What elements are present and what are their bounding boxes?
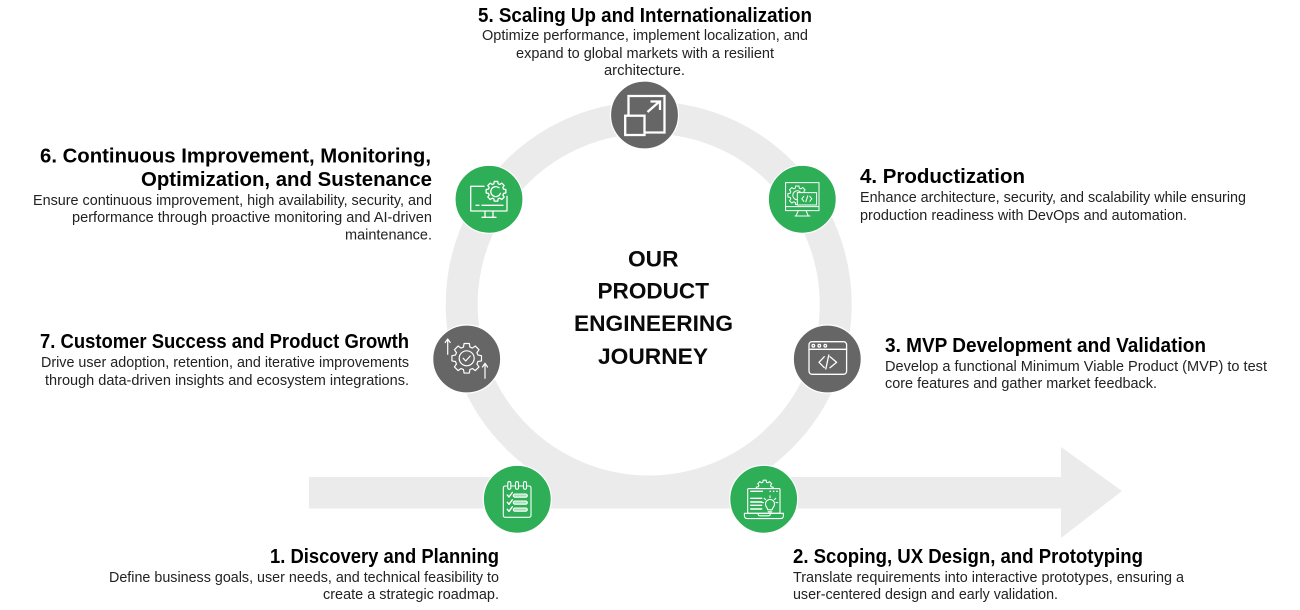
text: step 2 description [793, 570, 1185, 603]
text: step 6 description [33, 193, 432, 244]
text: step 5 description [482, 28, 808, 79]
text: step 3 description: Develop a functional Minimum Viable Product (MVP) to test [885, 359, 1267, 375]
step 7: customer success and product growth [40, 325, 501, 393]
center title: OUR [628, 246, 678, 272]
text: step 3 description: core features and gather market feedback. [885, 376, 1157, 392]
text: step 1 description: Define business goals, user needs, and technical feasibility to [109, 570, 499, 586]
step 5: scaling up and internationalization [478, 5, 812, 149]
icon: browser window with code [793, 325, 861, 393]
heading: step 2: 2. Scoping, UX Design, and Prototyping [793, 546, 1143, 568]
text: step 2 description: Translate requirements into interactive prototypes, ensuring a [793, 570, 1185, 586]
heading: step 7: 7. Customer Success and Product Growth [40, 331, 409, 353]
text: step 1 description [109, 570, 499, 603]
text: step 6 description: Ensure continuous improvement, high availability, security, and [33, 193, 432, 209]
arrow: horizontal journey arrow [309, 447, 1122, 538]
icon: laptop with gear and light bulb [730, 465, 798, 533]
step 3: MVP development and validation [793, 325, 1267, 393]
step 4: productization [768, 165, 1246, 233]
text: step 6 description: performance through proactive monitoring and AI-driven [72, 210, 432, 226]
center title: ENGINEERING [574, 311, 733, 336]
icon: resize squares [610, 81, 678, 149]
step 2: scoping, UX design, and prototyping [730, 465, 1185, 603]
heading: step 4: 4. Productization [860, 166, 1025, 188]
heading: step 5: 5. Scaling Up and Internationalization [478, 5, 812, 27]
center title [574, 246, 733, 369]
ring: journey cycle [462, 118, 836, 492]
text: step 5 description: architecture. [604, 63, 685, 79]
heading: step 6 [40, 146, 432, 191]
text: step 7 description: through data-driven insights and ecosystem integrations. [45, 373, 409, 389]
text: step 4 description: Enhance architecture, security, and scalability while ensuring [860, 190, 1246, 206]
icon: monitor with gear [455, 165, 523, 233]
text: step 4 description [860, 190, 1246, 224]
icon: monitor with code [768, 165, 836, 233]
heading: step 6: Optimization, and Sustenance [141, 169, 432, 191]
step 6: continuous improvement [33, 146, 523, 244]
text: step 5 description: expand to global markets with a resilient [516, 46, 774, 62]
center title: PRODUCT [598, 278, 709, 304]
text: step 2 description: user-centered design and early validation. [793, 587, 1058, 603]
text: step 7 description: Drive user adoption, retention, and iterative improvements [41, 355, 409, 371]
heading: step 3: 3. MVP Development and Validation [885, 335, 1206, 357]
heading: step 6: 6. Continuous Improvement, Monitoring, [40, 146, 431, 168]
text: step 5 description: Optimize performance, implement localization, and [482, 28, 808, 44]
text: step 6 description: maintenance. [345, 228, 432, 244]
step 1: discovery and planning [109, 465, 551, 603]
center title: JOURNEY [598, 344, 708, 369]
text: step 4 description: production readiness with DevOps and automation. [860, 208, 1187, 224]
text: step 7 description [41, 355, 409, 389]
text: step 1 description: create a strategic roadmap. [323, 587, 499, 603]
icon: gear with check and arrows [433, 325, 501, 393]
text: step 3 description [885, 359, 1267, 392]
heading: step 1: 1. Discovery and Planning [270, 546, 499, 568]
icon: checklist notepad [483, 465, 551, 533]
